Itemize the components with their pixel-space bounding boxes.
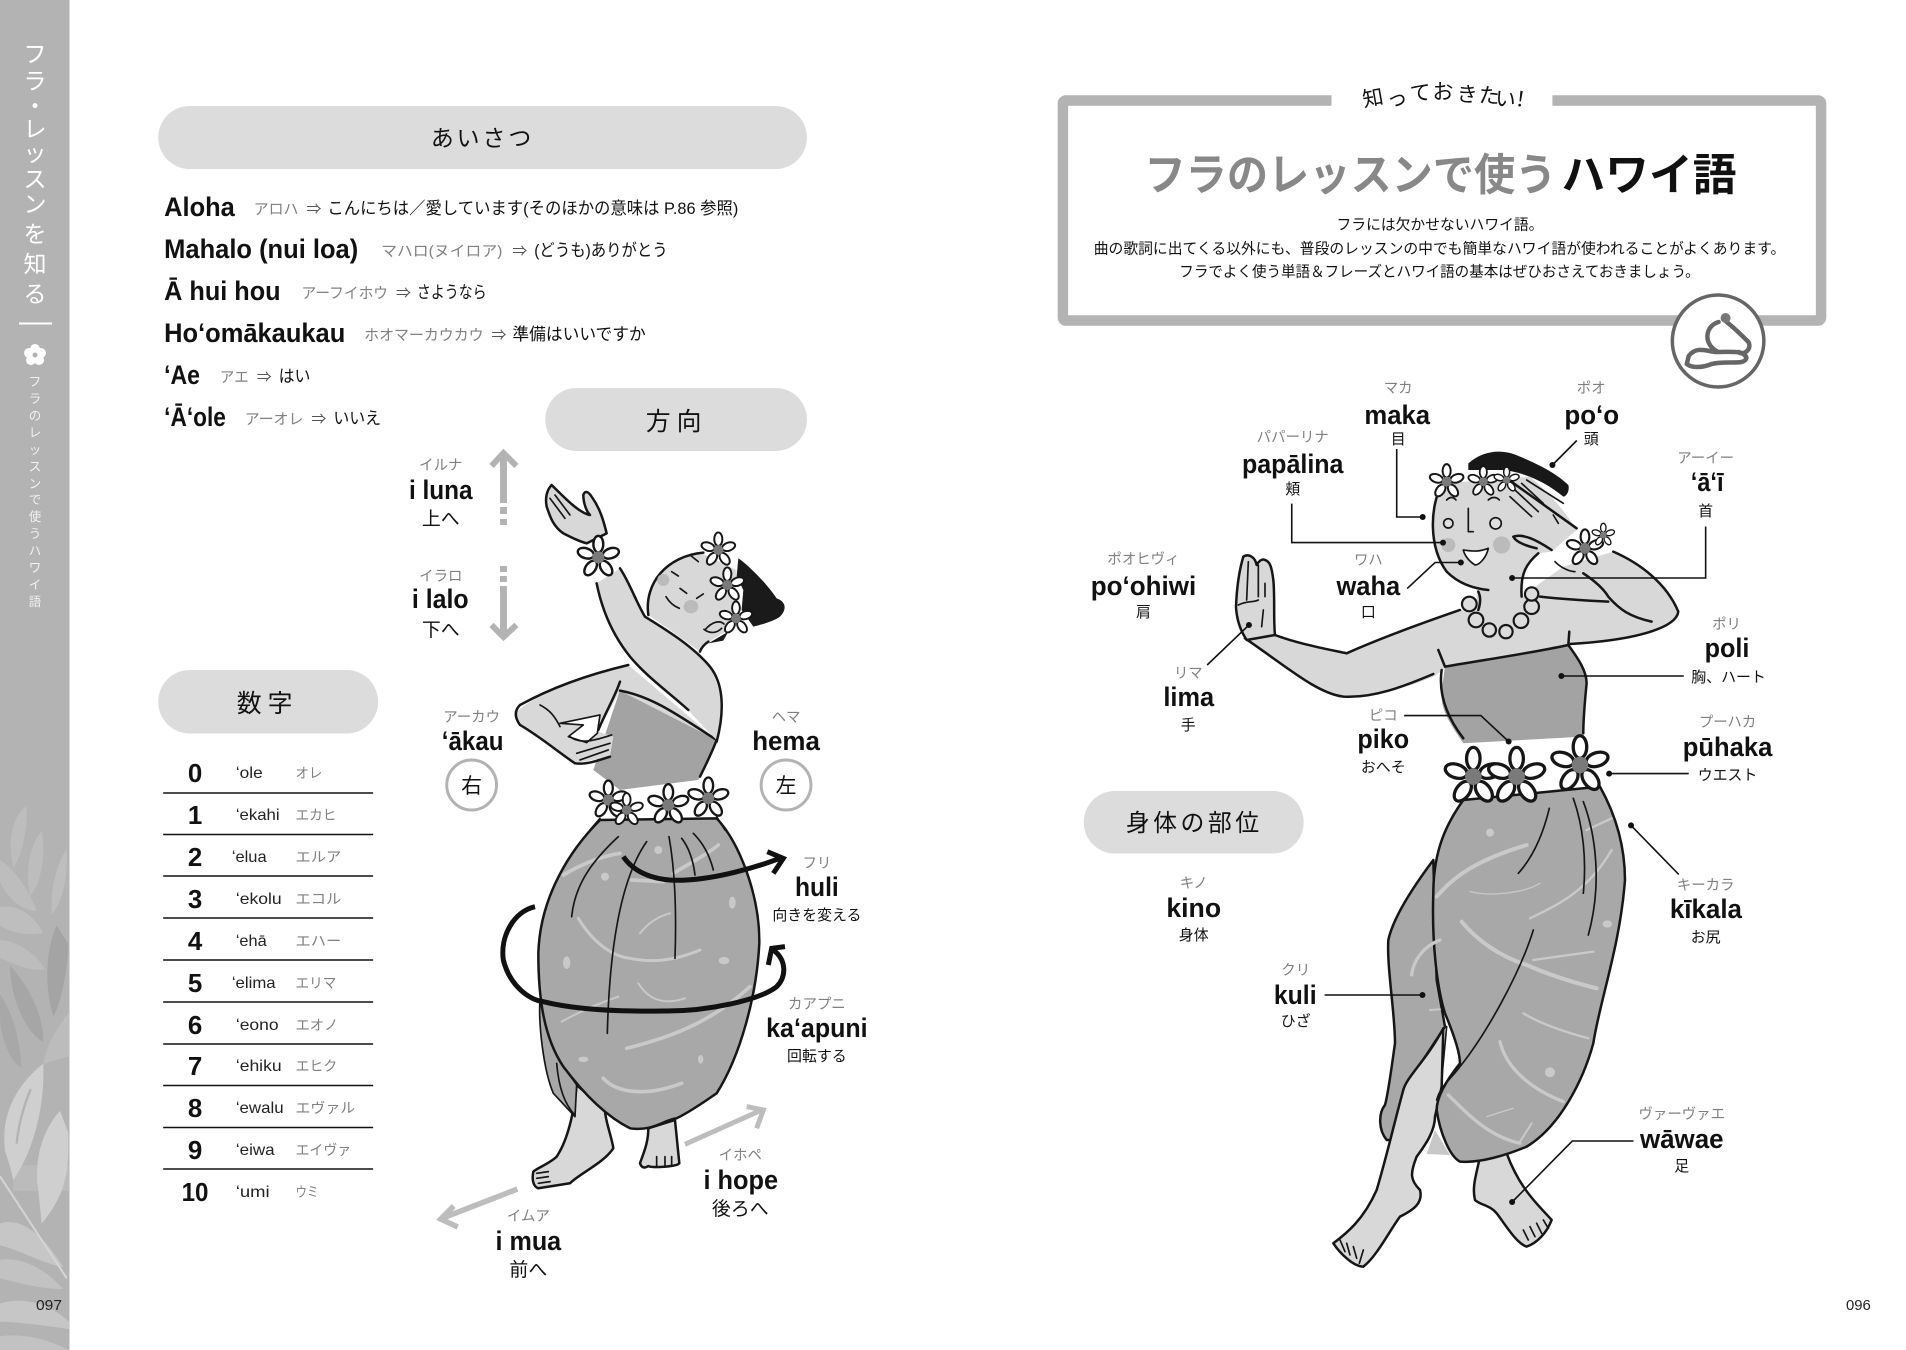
skirt — [538, 818, 759, 1129]
label: lima — [1163, 666, 1215, 734]
arrow: up — [492, 453, 516, 525]
greeting: A hui hou: ⇒ — [396, 285, 411, 302]
greeting: A hui hou: さようなら — [417, 283, 487, 302]
heading pill: body parts: 身体の部位 — [1126, 810, 1263, 837]
panel: greetings — [158, 106, 807, 432]
intro text — [1094, 216, 1785, 281]
wrist flower — [576, 536, 620, 578]
extended arm — [1247, 600, 1570, 697]
arrow: down — [492, 566, 516, 637]
greeting: Aloha: こんにちは／愛しています(そのほかの意味は P.86 参照) — [327, 199, 738, 218]
label: poli: poli — [1705, 633, 1749, 663]
label: wawae — [1639, 1106, 1725, 1175]
header box — [1063, 81, 1821, 387]
greeting: Aloha — [164, 192, 738, 222]
row 6: 6 — [188, 1012, 202, 1040]
row 9: ʻeiwa — [236, 1142, 275, 1159]
upper body — [515, 485, 785, 830]
left page content — [158, 106, 868, 1281]
label: kuli: kuli — [1274, 980, 1317, 1010]
skirt folds — [1437, 798, 1596, 1100]
wrist flowers — [1555, 523, 1615, 572]
label: kino — [1166, 876, 1221, 944]
greeting: Mahalo: Mahalo (nui loa) — [164, 234, 358, 264]
illustration: left dancer — [503, 485, 785, 1188]
greeting: Mahalo — [164, 234, 668, 264]
label: kino: kino — [1166, 893, 1221, 923]
row 6: エオノ — [296, 1017, 338, 1033]
greeting: A hui hou: Ā hui hou — [164, 276, 281, 306]
row 7: ʻehiku — [236, 1058, 282, 1075]
greeting: Ae: ⇒ — [257, 369, 272, 386]
front skirt — [1433, 787, 1625, 1162]
row 7 — [188, 1053, 337, 1081]
page number 097: 097 — [36, 1297, 62, 1314]
label: waha: waha — [1336, 571, 1401, 601]
skirt and legs — [533, 818, 763, 1188]
row 9 — [188, 1137, 351, 1165]
greeting: Hoomakaukau: ⇒ — [492, 327, 506, 344]
bent arm — [515, 665, 717, 763]
label: papalina: papālina — [1242, 449, 1344, 479]
label: i mua: i mua — [496, 1226, 562, 1256]
intro text: フラには欠かせないハワイ語。 — [1337, 216, 1543, 234]
greeting: Mahalo: ⇒ — [512, 243, 527, 260]
label: i mua: 前へ — [509, 1259, 547, 1281]
label: i luna: イルナ — [419, 458, 462, 474]
head flowers — [700, 532, 753, 634]
title emphasis: ハワイ語 — [1561, 151, 1736, 200]
label: hema: ヘマ — [772, 710, 800, 726]
row 1 — [188, 802, 336, 830]
icon: dancer badge — [1672, 295, 1764, 387]
label: lima: リマ — [1174, 666, 1203, 682]
hand — [1236, 555, 1275, 640]
label: kino: キノ — [1180, 876, 1208, 892]
inner shade — [1427, 1130, 1450, 1155]
label: lima: lima — [1163, 682, 1215, 712]
label: wawae: wāwae — [1639, 1124, 1724, 1154]
label: i lalo: 下へ — [422, 620, 460, 641]
label: ai: アーイー — [1677, 451, 1734, 467]
label: maka — [1364, 381, 1431, 448]
face — [648, 553, 737, 652]
raised arm — [597, 568, 722, 740]
toes — [537, 1157, 672, 1183]
label: poohiwi: ポオヒヴィ — [1107, 551, 1180, 568]
back skirt panel — [1380, 860, 1445, 1140]
label: maka: マカ — [1384, 381, 1413, 397]
label: poo: 頭 — [1584, 431, 1599, 448]
label: i hope — [703, 1148, 778, 1220]
row 0: オレ — [296, 765, 322, 781]
label: poohiwi: 肩 — [1136, 604, 1151, 621]
toes — [1340, 1220, 1548, 1263]
arrow: huli — [623, 852, 783, 880]
label: i lalo — [412, 569, 469, 641]
greeting: Hoomakaukau: 準備はいいですか — [512, 325, 646, 344]
hand at head — [1510, 480, 1563, 523]
hair — [1468, 452, 1569, 497]
right leg — [640, 1120, 679, 1167]
number table — [163, 760, 373, 1207]
neck — [1477, 573, 1523, 610]
waist flowers — [588, 778, 730, 826]
row 9: 9 — [188, 1137, 202, 1165]
greeting: Hoomakaukau: ホオマーカウカウ — [364, 327, 484, 344]
back fold — [540, 1000, 577, 1117]
label: ai: 首 — [1698, 503, 1713, 520]
row 0: ʻole — [236, 765, 263, 782]
label: kuli: ひざ — [1281, 1012, 1311, 1030]
row 5: エリマ — [296, 975, 336, 991]
leaf pattern — [0, 805, 69, 1350]
row 1: 1 — [188, 802, 202, 830]
label: papalina — [1242, 429, 1344, 498]
row 4 — [188, 928, 341, 956]
sidebar subtitle: フラのレッスンで使うハワイ語 — [29, 375, 42, 609]
label: waha: ワハ — [1354, 553, 1383, 569]
heading pill: body parts — [1084, 791, 1304, 854]
row 4: 4 — [188, 928, 203, 956]
skirt swirls — [1412, 818, 1612, 1143]
greeting: Hoomakaukau — [164, 318, 646, 348]
label: puhaka: pūhaka — [1683, 732, 1773, 762]
icon: flower — [24, 344, 46, 365]
label: maka: 目 — [1391, 431, 1406, 448]
label: akau: ʻākau — [442, 726, 503, 756]
row 8: エヴァル — [296, 1100, 355, 1116]
row 5 — [188, 970, 336, 998]
intro text: 曲の歌詞に出てくる以外にも、普段のレッスンの中でも簡単なハワイ語が使われることがよくあります。 — [1094, 239, 1785, 258]
heading pill: numbers: 数字 — [237, 690, 298, 718]
upper body — [1236, 452, 1678, 804]
raised arm — [1517, 552, 1678, 643]
row 10: 10 — [182, 1179, 208, 1207]
greeting: Ae: はい — [279, 367, 310, 386]
panel: body parts — [1084, 380, 1773, 1205]
label: kino: 身体 — [1179, 927, 1209, 944]
row 5: ʻelima — [232, 975, 276, 992]
label: huli: 向きを変える — [772, 907, 861, 924]
label: i lalo: イラロ — [419, 569, 462, 585]
greeting: A hui hou — [164, 276, 487, 306]
row 2: エルア — [296, 849, 341, 865]
row 2: 2 — [188, 844, 202, 872]
label: hema — [752, 710, 821, 810]
greeting: Aloha: Aloha — [164, 192, 236, 222]
label: kikala: キーカラ — [1677, 878, 1734, 894]
heading pill: direction — [545, 388, 807, 451]
label: i hope: i hope — [703, 1165, 778, 1195]
label: kaapuni: カアプニ — [788, 996, 846, 1013]
panel: numbers — [158, 670, 378, 1207]
right page content — [1063, 81, 1871, 1314]
row 10: ʻumi — [236, 1184, 270, 1201]
row 6 — [188, 1012, 338, 1040]
illustration: right dancer — [1236, 452, 1678, 1267]
row 7: 7 — [188, 1053, 202, 1081]
label: puhaka: ウエスト — [1698, 767, 1757, 784]
label: kaapuni: 回転する — [787, 1048, 847, 1065]
waist flowers — [1443, 736, 1610, 804]
row 7: エヒク — [296, 1058, 337, 1074]
label: i hope: イホペ — [719, 1148, 762, 1164]
label: akau: 右 — [461, 775, 482, 798]
greeting: A hui hou: アーフイホウ — [301, 285, 388, 302]
torso — [593, 690, 717, 790]
row 8: ʻewalu — [236, 1100, 284, 1117]
arrow: kaapuni — [503, 907, 785, 1011]
greeting: Ae: ʻAe — [164, 360, 200, 390]
arrow: i mua — [441, 1189, 517, 1227]
necklace — [1462, 587, 1539, 638]
skirt swirls — [562, 845, 750, 1092]
row 0: 0 — [188, 760, 202, 788]
label: wawae: ヴァーヴァエ — [1639, 1106, 1725, 1123]
row 2: ʻelua — [232, 849, 267, 866]
heading pill: numbers — [158, 670, 378, 734]
hair — [708, 558, 785, 643]
back leg — [1474, 1153, 1552, 1247]
greeting: Ae: アエ — [220, 369, 249, 386]
row 8: 8 — [188, 1095, 202, 1123]
eyebrow: 知っておきたい！ — [1361, 81, 1532, 113]
title: フラのレッスンで使う — [1144, 151, 1556, 200]
hair flowers — [1429, 464, 1520, 498]
label: huli — [772, 856, 861, 924]
row 4: エハー — [296, 933, 341, 949]
face features — [1441, 497, 1510, 565]
greeting: Aole: ʻĀʻole — [164, 402, 226, 432]
label: poli: 胸、ハート — [1691, 669, 1766, 686]
sidebar — [0, 0, 70, 1350]
label: huli: フリ — [802, 856, 831, 872]
hand on waist — [560, 715, 600, 743]
label: kikala: お尻 — [1691, 929, 1721, 946]
face features — [657, 555, 724, 632]
label: i lalo: i lalo — [412, 584, 469, 614]
lower body — [1333, 787, 1625, 1267]
row 5: 5 — [188, 970, 202, 998]
label: poo: ポオ — [1577, 380, 1606, 397]
raised hand — [546, 485, 607, 543]
arms of the ref line at torso — [590, 817, 725, 830]
label: piko: piko — [1357, 724, 1409, 754]
heading pill: aisatsu: あいさつ — [431, 125, 534, 151]
label: hema: 左 — [776, 775, 796, 798]
greeting: Aole: いいえ — [333, 409, 381, 428]
label: kikala: kīkala — [1670, 894, 1743, 924]
label: hema: hema — [752, 726, 821, 756]
greeting: Hoomakaukau: Hoʻomākaukau — [164, 318, 345, 348]
greeting: Mahalo: マハロ(ヌイロア) — [381, 243, 502, 260]
row 0 — [188, 760, 322, 788]
panel: directions — [409, 388, 868, 1281]
row 3 — [188, 886, 341, 914]
row 10: ウミ — [296, 1184, 318, 1200]
label: i hope: 後ろへ — [712, 1198, 769, 1220]
label: waha — [1336, 553, 1401, 621]
label: i luna — [409, 458, 474, 530]
left leg — [533, 1085, 613, 1188]
label: ai: ʻāʻī — [1691, 467, 1724, 497]
heading pill: aisatsu — [158, 106, 807, 169]
row 3: ʻekolu — [236, 891, 282, 908]
label: i luna: 上へ — [422, 508, 460, 530]
skirt folds — [572, 833, 713, 1033]
row 3: 3 — [188, 886, 202, 914]
page number 096: 096 — [1846, 1297, 1871, 1314]
label: poli: ポリ — [1712, 616, 1741, 633]
label: maka: maka — [1364, 400, 1431, 430]
greeting: Ae — [164, 360, 310, 390]
torso — [1441, 645, 1587, 743]
row 10 — [182, 1179, 318, 1207]
heading pill: direction: 方向 — [646, 408, 707, 436]
label: kikala — [1670, 878, 1743, 946]
greeting: Aole — [164, 402, 381, 432]
face — [1433, 477, 1577, 590]
greeting: Aole: ⇒ — [311, 411, 326, 428]
label: kuli: クリ — [1281, 962, 1310, 979]
label: i luna: i luna — [409, 475, 474, 505]
sidebar title: フラ・レッスンを知る — [24, 41, 46, 307]
label: poohiwi: poʻohiwi — [1091, 571, 1196, 601]
row 3: エコル — [296, 891, 341, 907]
row 1: エカヒ — [296, 807, 336, 823]
arrow: i hope — [685, 1107, 763, 1144]
label: akau: アーカウ — [443, 709, 500, 726]
label: i mua — [496, 1209, 562, 1281]
row 6: ʻeono — [236, 1017, 279, 1034]
label: lima: 手 — [1181, 717, 1196, 734]
row 9: エイヴァ — [296, 1142, 351, 1158]
greeting: Aloha: ⇒ — [306, 201, 321, 218]
label: piko: ピコ — [1369, 708, 1398, 725]
label: kaapuni: kaʻapuni — [766, 1013, 868, 1043]
label: ai — [1677, 451, 1734, 520]
label: waha: 口 — [1361, 604, 1376, 621]
leader lines — [1207, 440, 1706, 1205]
row 8 — [188, 1095, 355, 1123]
label: papalina: 頬 — [1285, 481, 1300, 498]
label: puhaka — [1683, 714, 1773, 784]
label: piko: おへそ — [1361, 759, 1406, 776]
label: kaapuni — [766, 996, 868, 1065]
label: i mua: イムア — [507, 1209, 550, 1225]
intro text: フラでよく使う単語＆フレーズとハワイ語の基本はぜひおさえておきましょう。 — [1179, 263, 1700, 281]
row 2 — [188, 844, 341, 872]
label: akau — [442, 709, 503, 810]
greeting: Aloha: アロハ — [254, 201, 298, 218]
label: poohiwi — [1091, 551, 1196, 621]
label: poo: poʻo — [1564, 400, 1619, 430]
label: piko — [1357, 708, 1409, 776]
greeting: Aole: アーオレ — [245, 411, 303, 428]
label: huli: huli — [795, 872, 839, 902]
label: papalina: パパーリナ — [1257, 429, 1329, 446]
label: kuli — [1274, 962, 1317, 1030]
label: puhaka: プーハカ — [1699, 714, 1756, 731]
row 4: ʻehā — [236, 933, 267, 950]
row 1: ʻekahi — [236, 807, 280, 824]
greeting: Mahalo: (どうも)ありがとう — [534, 241, 668, 260]
label: wawae: 足 — [1674, 1158, 1689, 1175]
front leg — [1333, 1028, 1443, 1267]
label: poli — [1691, 616, 1766, 686]
label: poo — [1564, 380, 1619, 448]
